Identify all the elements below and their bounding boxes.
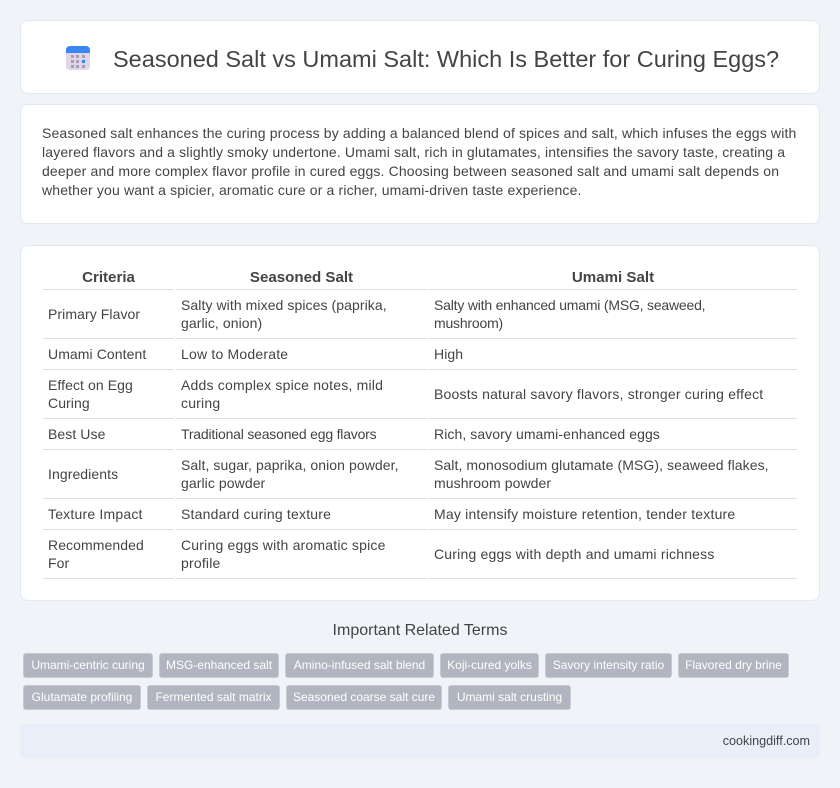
tag group: related terms: Glutamate profiling (32, 690, 132, 704)
comparison table: Traditional seasoned egg flavors (181, 426, 376, 442)
comparison table: Adds complex spice notes, mild (181, 377, 383, 393)
text block: introduction: deeper and more complex flavor profile in cured eggs. Choosing between seasoned salt and umami salt depends on (42, 163, 779, 179)
footer (20, 724, 820, 758)
tag group: related terms: Umami-centric curing (31, 658, 145, 672)
comparison table: profile (181, 555, 221, 571)
tag group: related terms: MSG-enhanced salt (166, 658, 272, 672)
comparison table (43, 269, 797, 579)
comparison table: curing (181, 395, 220, 411)
comparison table: Best Use (48, 426, 105, 442)
comparison table: Boosts natural savory flavors, stronger curing effect (434, 386, 763, 402)
comparison table: Umami Content (48, 346, 146, 362)
comparison table: Salt, monosodium glutamate (MSG), seaweed flakes, (434, 457, 769, 473)
comparison table: Curing eggs with depth and umami richness (434, 546, 715, 562)
text block: introduction (42, 125, 796, 198)
comparison table: garlic powder (181, 475, 265, 491)
comparison table: Primary Flavor (48, 306, 140, 322)
comparison table: High (434, 346, 463, 362)
text block: introduction: layered flavors and a slightly smoky undertone. Umami salt, rich in glutamates, intensifies the savory taste, creating a (42, 144, 785, 160)
comparison table: Salty with enhanced umami (MSG, seaweed, (434, 297, 705, 313)
tag group: related terms (23, 653, 789, 710)
comparison table: Rich, savory umami-enhanced eggs (434, 426, 660, 442)
comparison table: Ingredients (48, 466, 118, 482)
comparison table: For (48, 555, 69, 571)
panel: header (20, 20, 820, 94)
text block: introduction: Seasoned salt enhances the curing process by adding a balanced blend of spices and salt, which infuses the eggs with (42, 125, 796, 141)
icon: calendar (66, 46, 90, 70)
tag group: related terms: Savory intensity ratio (553, 658, 664, 672)
comparison table: Criteria (82, 269, 135, 286)
comparison table: Texture Impact (48, 506, 143, 522)
comparison table: Umami Salt (572, 269, 654, 286)
tag group: related terms: Fermented salt matrix (155, 690, 272, 704)
comparison table: Salt, sugar, paprika, onion powder, (181, 457, 399, 473)
footer: cookingdiff.com (723, 734, 810, 748)
comparison table: Recommended (48, 537, 144, 553)
tag group: related terms: Koji-cured yolks (447, 658, 532, 672)
text block: introduction: whether you want a spicier, aromatic cure or a richer, umami-driven taste experience. (42, 182, 582, 198)
tag group: related terms: Seasoned coarse salt cure (293, 690, 435, 704)
heading: related terms: Important Related Terms (333, 622, 507, 639)
title: Seasoned Salt vs Umami Salt: Which Is Better for Curing Eggs? (113, 46, 779, 72)
comparison table: mushroom powder (434, 475, 551, 491)
panel: introduction (20, 104, 820, 224)
comparison table: mushroom) (434, 315, 503, 331)
tag group: related terms: Umami salt crusting (457, 690, 562, 704)
panel: comparison table (20, 245, 820, 601)
comparison table: Low to Moderate (181, 346, 288, 362)
comparison table: Salty with mixed spices (paprika, (181, 297, 387, 313)
comparison table: Seasoned Salt (250, 269, 353, 286)
comparison table: garlic, onion) (181, 315, 262, 331)
comparison table: Standard curing texture (181, 506, 331, 522)
tag group: related terms: Amino-infused salt blend (294, 658, 425, 672)
comparison table: Curing eggs with aromatic spice (181, 537, 386, 553)
tag group: related terms: Flavored dry brine (685, 658, 782, 672)
comparison table: Effect on Egg (48, 377, 133, 393)
comparison table: May intensify moisture retention, tender texture (434, 506, 735, 522)
comparison table: Curing (48, 395, 90, 411)
